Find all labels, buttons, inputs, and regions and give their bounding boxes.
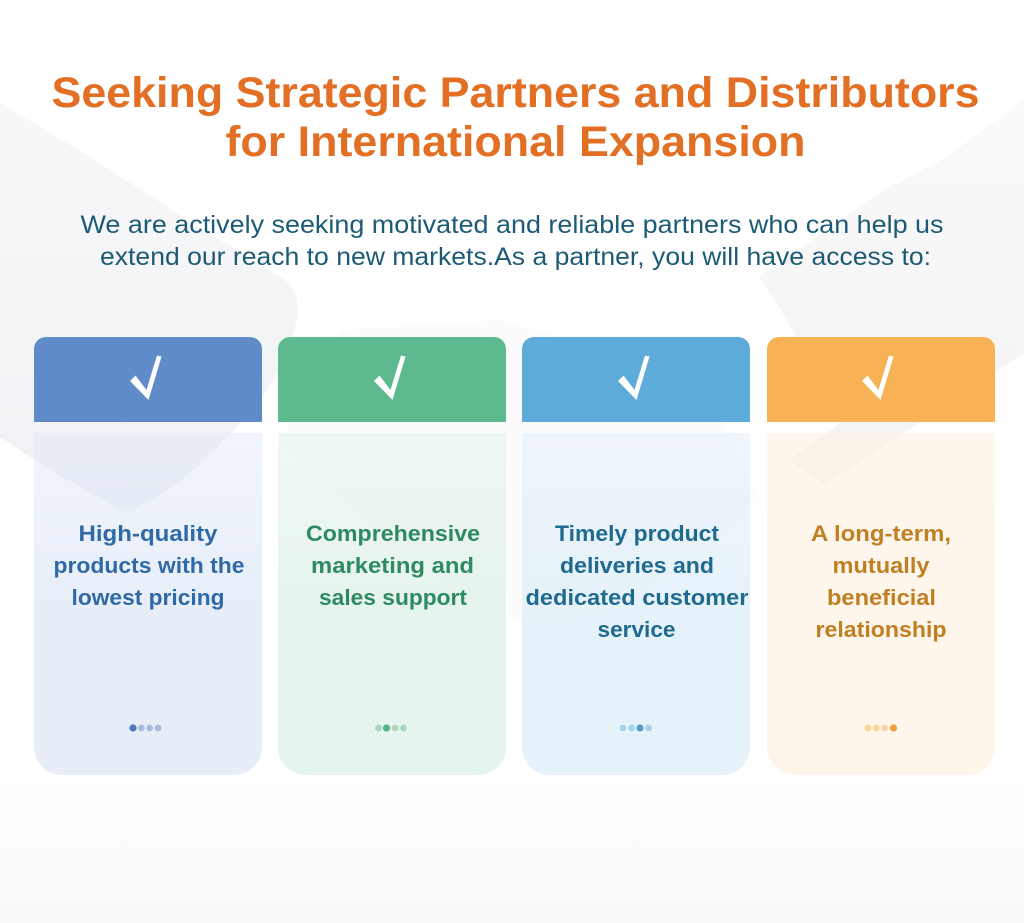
card text: beneficial xyxy=(827,585,936,610)
panel: long-term relationship xyxy=(767,337,995,775)
title: for International Expansion xyxy=(226,118,806,166)
title xyxy=(52,69,980,166)
panel: high-quality products xyxy=(34,337,262,775)
intro text: extend our reach to new markets.As a partner, you will have access to: xyxy=(100,243,931,271)
card header xyxy=(278,337,506,422)
card text: service xyxy=(598,617,676,642)
card text xyxy=(54,521,244,610)
title: Seeking Strategic Partners and Distributors xyxy=(52,69,980,117)
intro text xyxy=(80,211,944,271)
card text xyxy=(811,521,951,642)
pagination dots xyxy=(865,724,897,732)
card body xyxy=(278,433,506,775)
panel: timely deliveries xyxy=(522,337,750,775)
card text: relationship xyxy=(816,617,946,642)
card text xyxy=(306,521,480,610)
card text: sales support xyxy=(319,585,468,610)
card text: marketing and xyxy=(311,553,474,578)
card text xyxy=(526,521,749,642)
icon: check mark xyxy=(374,356,406,400)
panel: marketing and sales support xyxy=(278,337,506,775)
card body xyxy=(522,433,750,775)
card body xyxy=(34,433,262,775)
intro text: We are actively seeking motivated and reliable partners who can help us xyxy=(80,211,944,239)
card text: lowest pricing xyxy=(72,585,224,610)
icon: check mark xyxy=(130,356,162,400)
card body xyxy=(767,433,995,775)
card text: dedicated customer xyxy=(526,585,749,610)
card header xyxy=(522,337,750,422)
card text: A long-term, xyxy=(811,521,951,546)
card text: products with the xyxy=(54,553,244,578)
icon: check mark xyxy=(618,356,650,400)
pagination dots xyxy=(129,724,161,732)
card header xyxy=(767,337,995,422)
card header xyxy=(34,337,262,422)
card text: mutually xyxy=(832,553,930,578)
pagination dots xyxy=(620,724,652,732)
card text: High-quality xyxy=(78,521,218,546)
card text: deliveries and xyxy=(560,553,714,578)
card text: Timely product xyxy=(555,521,720,546)
icon: check mark xyxy=(862,356,894,400)
pagination dots xyxy=(375,724,407,732)
card text: Comprehensive xyxy=(306,521,480,546)
